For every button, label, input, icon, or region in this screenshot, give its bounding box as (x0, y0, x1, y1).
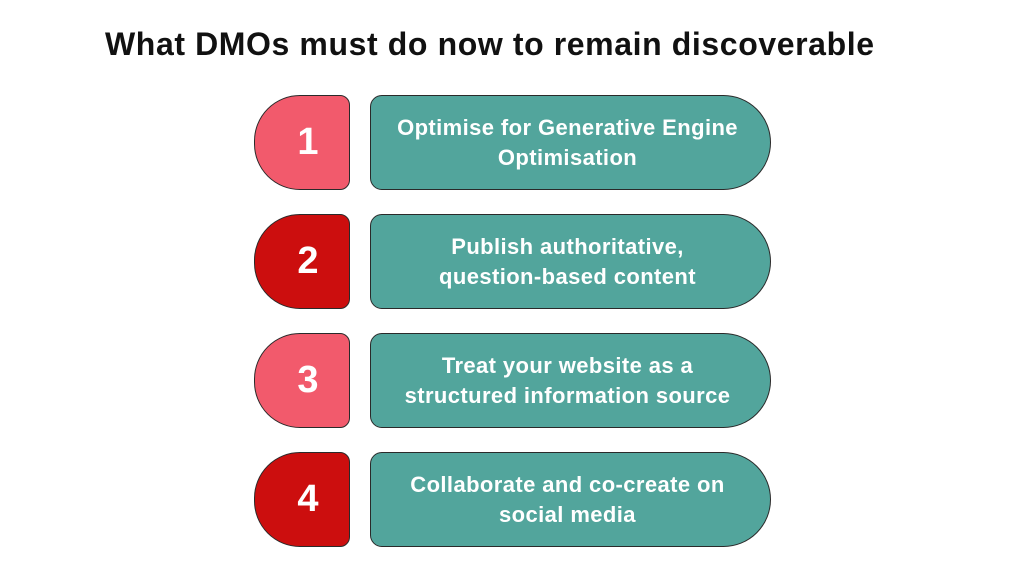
number 3 (254, 333, 350, 428)
text 1: Optimisation (498, 144, 637, 170)
text 1 (370, 95, 771, 190)
number 4 (254, 452, 350, 547)
step 3 (254, 333, 771, 428)
text 2: Publish authoritative, (451, 234, 684, 258)
number 1: 1 (297, 121, 319, 163)
number 2 (254, 214, 350, 309)
text 3 (370, 333, 771, 428)
number 2: 2 (297, 240, 319, 282)
text 3: Treat your website as a (442, 352, 693, 378)
text 2 (370, 214, 771, 309)
text 1: Optimise for Generative Engine (397, 114, 738, 140)
number 1 (254, 95, 350, 190)
number 3: 3 (297, 359, 319, 401)
text 3: structured information source (405, 382, 730, 408)
number 4: 4 (297, 478, 319, 520)
step 4 (254, 452, 771, 547)
text 4: social media (499, 502, 636, 526)
step 2 (254, 214, 771, 309)
step 1 (254, 95, 771, 190)
text 2: question-based content (439, 264, 696, 288)
text 4: Collaborate and co-create on (410, 472, 725, 496)
text 4 (370, 452, 771, 547)
title: What DMOs must do now to remain discoverable (105, 26, 875, 62)
